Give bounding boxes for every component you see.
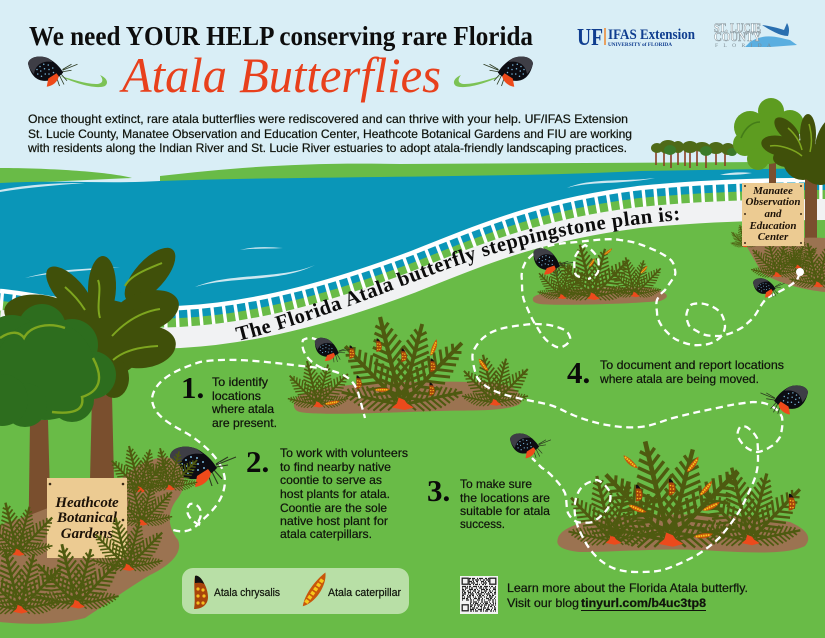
blog call to action — [507, 581, 748, 611]
sign: Heathcote Botanical Gardens: Botanical — [56, 510, 118, 526]
step 2: Coontie are the sole — [280, 501, 387, 515]
intro paragraph: Once thought extinct, rare atala butterflies were rediscovered and can thrive with your help. UF/IFAS Extension — [28, 112, 628, 126]
logo: UF IFAS Extension: IFAS Extension — [608, 27, 695, 43]
icon: right butterfly with trail — [454, 56, 533, 87]
sign: Manatee Observation and Education Center: Manatee — [752, 185, 793, 197]
blog call to action: Visit our blog — [507, 596, 579, 610]
step 2: atala caterpillars. — [280, 527, 372, 541]
step 1 — [181, 370, 277, 430]
QR code — [460, 576, 498, 614]
step 3: To make sure — [460, 477, 532, 491]
title: We need YOUR HELP conserving rare Florida — [29, 20, 533, 51]
step 3 — [427, 473, 550, 531]
script subtitle: Atala Butterflies — [119, 47, 441, 103]
fence pickets — [0, 190, 825, 319]
sign: Manatee Observation and Education Center: Education — [748, 220, 797, 232]
step 1: are present. — [212, 416, 277, 430]
step 3: 3. — [427, 473, 450, 508]
lawn — [0, 190, 825, 638]
tree: right palm — [759, 113, 825, 248]
legend panel: Atala caterpillar — [328, 587, 401, 599]
sign: Manatee Observation and Education Center: Center — [758, 231, 789, 243]
butterflies on the path — [170, 246, 808, 487]
logo: UF IFAS Extension: UNIVERSITY of FLORIDA — [608, 42, 672, 48]
banner heading: The Florida Atala butterfly steppingstone plan is: — [235, 208, 679, 340]
step 4: where atala are being moved. — [599, 372, 759, 386]
logo: St. Lucie County — [714, 20, 797, 49]
step 2: native host plant for — [280, 514, 388, 528]
logo: UF IFAS Extension: UF — [577, 25, 603, 51]
dashed flight path — [152, 239, 800, 572]
intro paragraph — [27, 112, 632, 155]
logo: UF IFAS Extension — [577, 25, 695, 51]
plants in front of Heathcote sign — [0, 500, 169, 618]
icon: left butterfly with trail — [28, 56, 107, 87]
logo: St. Lucie County: ST. LUCIE — [714, 20, 761, 35]
sign: Manatee Observation and Education Center: and — [764, 208, 782, 220]
sign: Heathcote Botanical Gardens: Gardens — [61, 526, 113, 542]
tree: right round tree — [733, 98, 804, 191]
white path endpoints — [159, 268, 804, 529]
step 3: the locations are — [460, 491, 550, 505]
step 3: suitable for atala — [460, 504, 550, 518]
left palm tree — [2, 240, 184, 480]
left round tree — [0, 304, 116, 570]
step 4: 4. — [567, 355, 590, 390]
step 2: To work with volunteers — [280, 446, 408, 460]
river water — [0, 168, 825, 340]
blog call to action: tinyurl.com/b4uc3tp8 — [581, 596, 706, 610]
distant palm trees — [651, 140, 737, 168]
step 1: 1. — [181, 370, 204, 405]
intro paragraph: with residents along the Indian River and St. Lucie River estuaries to adopt atala-friendly landscaping practices. — [27, 141, 627, 155]
garden: lower right coontie bed — [557, 437, 809, 554]
sign: Heathcote Botanical Gardens — [47, 478, 127, 558]
step 1: To identify — [212, 375, 268, 389]
step 1: locations — [212, 389, 261, 403]
white path banner — [0, 210, 825, 338]
logo: St. Lucie County: COUNTY — [714, 29, 762, 44]
garden: middle coontie bed — [284, 313, 534, 416]
sign: Manatee Observation and Education Center: Observation — [746, 196, 800, 208]
garden: top right mulch bed — [729, 224, 825, 292]
sign: Heathcote Botanical Gardens: Heathcote — [54, 495, 119, 511]
legend panel — [182, 568, 409, 614]
step 2: to find nearby native — [280, 460, 391, 474]
far shoreline — [0, 162, 825, 184]
sign: Manatee Observation and Education Center — [742, 183, 804, 246]
step 4 — [567, 355, 784, 390]
fence rail — [0, 180, 825, 309]
blog call to action: Learn more about the Florida Atala butterfly. — [507, 581, 748, 595]
garden: upper centre coontie — [533, 242, 667, 305]
plants behind Heathcote sign — [106, 444, 202, 529]
step 2: 2. — [246, 444, 269, 479]
step 2: coontie to serve as — [280, 473, 382, 487]
garden: Heathcote mulch bed — [0, 457, 184, 624]
step 2: host plants for atala. — [280, 487, 390, 501]
step 4: To document and report locations — [600, 358, 784, 372]
step 2 — [246, 444, 408, 541]
legend panel: Atala chrysalis — [214, 587, 280, 599]
step 1: where atala — [211, 402, 274, 416]
intro paragraph: St. Lucie County, Manatee Observation and Education Center, Heathcote Botanical Gardens and FIU are working — [28, 127, 632, 141]
logo: St. Lucie County: FLORIDA — [715, 43, 771, 49]
step 3: success. — [460, 517, 505, 531]
